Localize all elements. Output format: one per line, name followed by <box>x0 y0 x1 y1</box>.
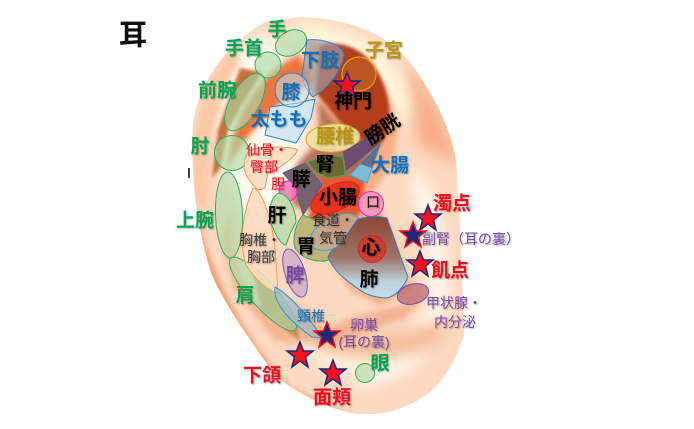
labels: 気管 <box>319 230 347 246</box>
labels: 膵 <box>291 168 311 190</box>
zones: spine and sacrum <box>242 147 298 293</box>
labels: 腎 <box>315 154 335 176</box>
labels: 下肢 <box>301 50 339 72</box>
labels: 仙骨・ <box>246 142 288 158</box>
labels: 胆 <box>271 176 285 192</box>
zones: organs <box>269 57 431 338</box>
labels: 心 <box>361 236 381 258</box>
labels: 膀胱 <box>361 110 405 150</box>
labels: 肝 <box>267 204 287 226</box>
labels: 臀部 <box>250 159 278 175</box>
labels: 卵巣 <box>350 317 378 333</box>
labels: 甲状腺・ <box>426 295 482 311</box>
labels: 下頜 <box>243 364 281 386</box>
labels: 前腕 <box>198 80 236 102</box>
labels: 頸椎 <box>297 308 325 324</box>
labels <box>176 18 520 408</box>
labels: 胸椎・ <box>239 232 281 248</box>
labels: 手首 <box>225 36 263 60</box>
labels: 子宮 <box>365 40 403 62</box>
labels: 飢点 <box>431 260 469 282</box>
labels: 濁点 <box>433 192 471 214</box>
labels: 内分泌 <box>434 314 476 330</box>
labels: 神門 <box>334 90 372 112</box>
labels: 手 <box>267 18 287 40</box>
labels: 眼 <box>370 354 390 374</box>
labels: 胸部 <box>247 249 275 265</box>
labels: 大腸 <box>371 154 409 176</box>
labels: 口 <box>366 194 380 210</box>
labels: 腰椎 <box>316 126 354 148</box>
labels: 太もも <box>250 108 308 130</box>
labels: 面頬 <box>313 386 351 408</box>
labels: 膝 <box>281 82 301 104</box>
stars <box>287 72 441 385</box>
labels: 上腕 <box>176 210 214 232</box>
labels: 肘 <box>190 136 210 158</box>
ear illustration <box>188 17 464 414</box>
labels: 副腎（耳の裏） <box>422 231 520 247</box>
labels: 小腸 <box>319 186 357 208</box>
zones: hand and arm <box>214 24 374 382</box>
labels: 胃 <box>296 236 316 258</box>
labels: 肺 <box>359 268 379 290</box>
labels: (耳の裏) <box>338 334 390 350</box>
labels: 肩 <box>235 286 255 306</box>
labels: 食道・ <box>312 212 354 228</box>
zones: leg <box>265 40 344 143</box>
title: 耳 <box>119 20 147 50</box>
labels: 脾 <box>285 264 305 286</box>
